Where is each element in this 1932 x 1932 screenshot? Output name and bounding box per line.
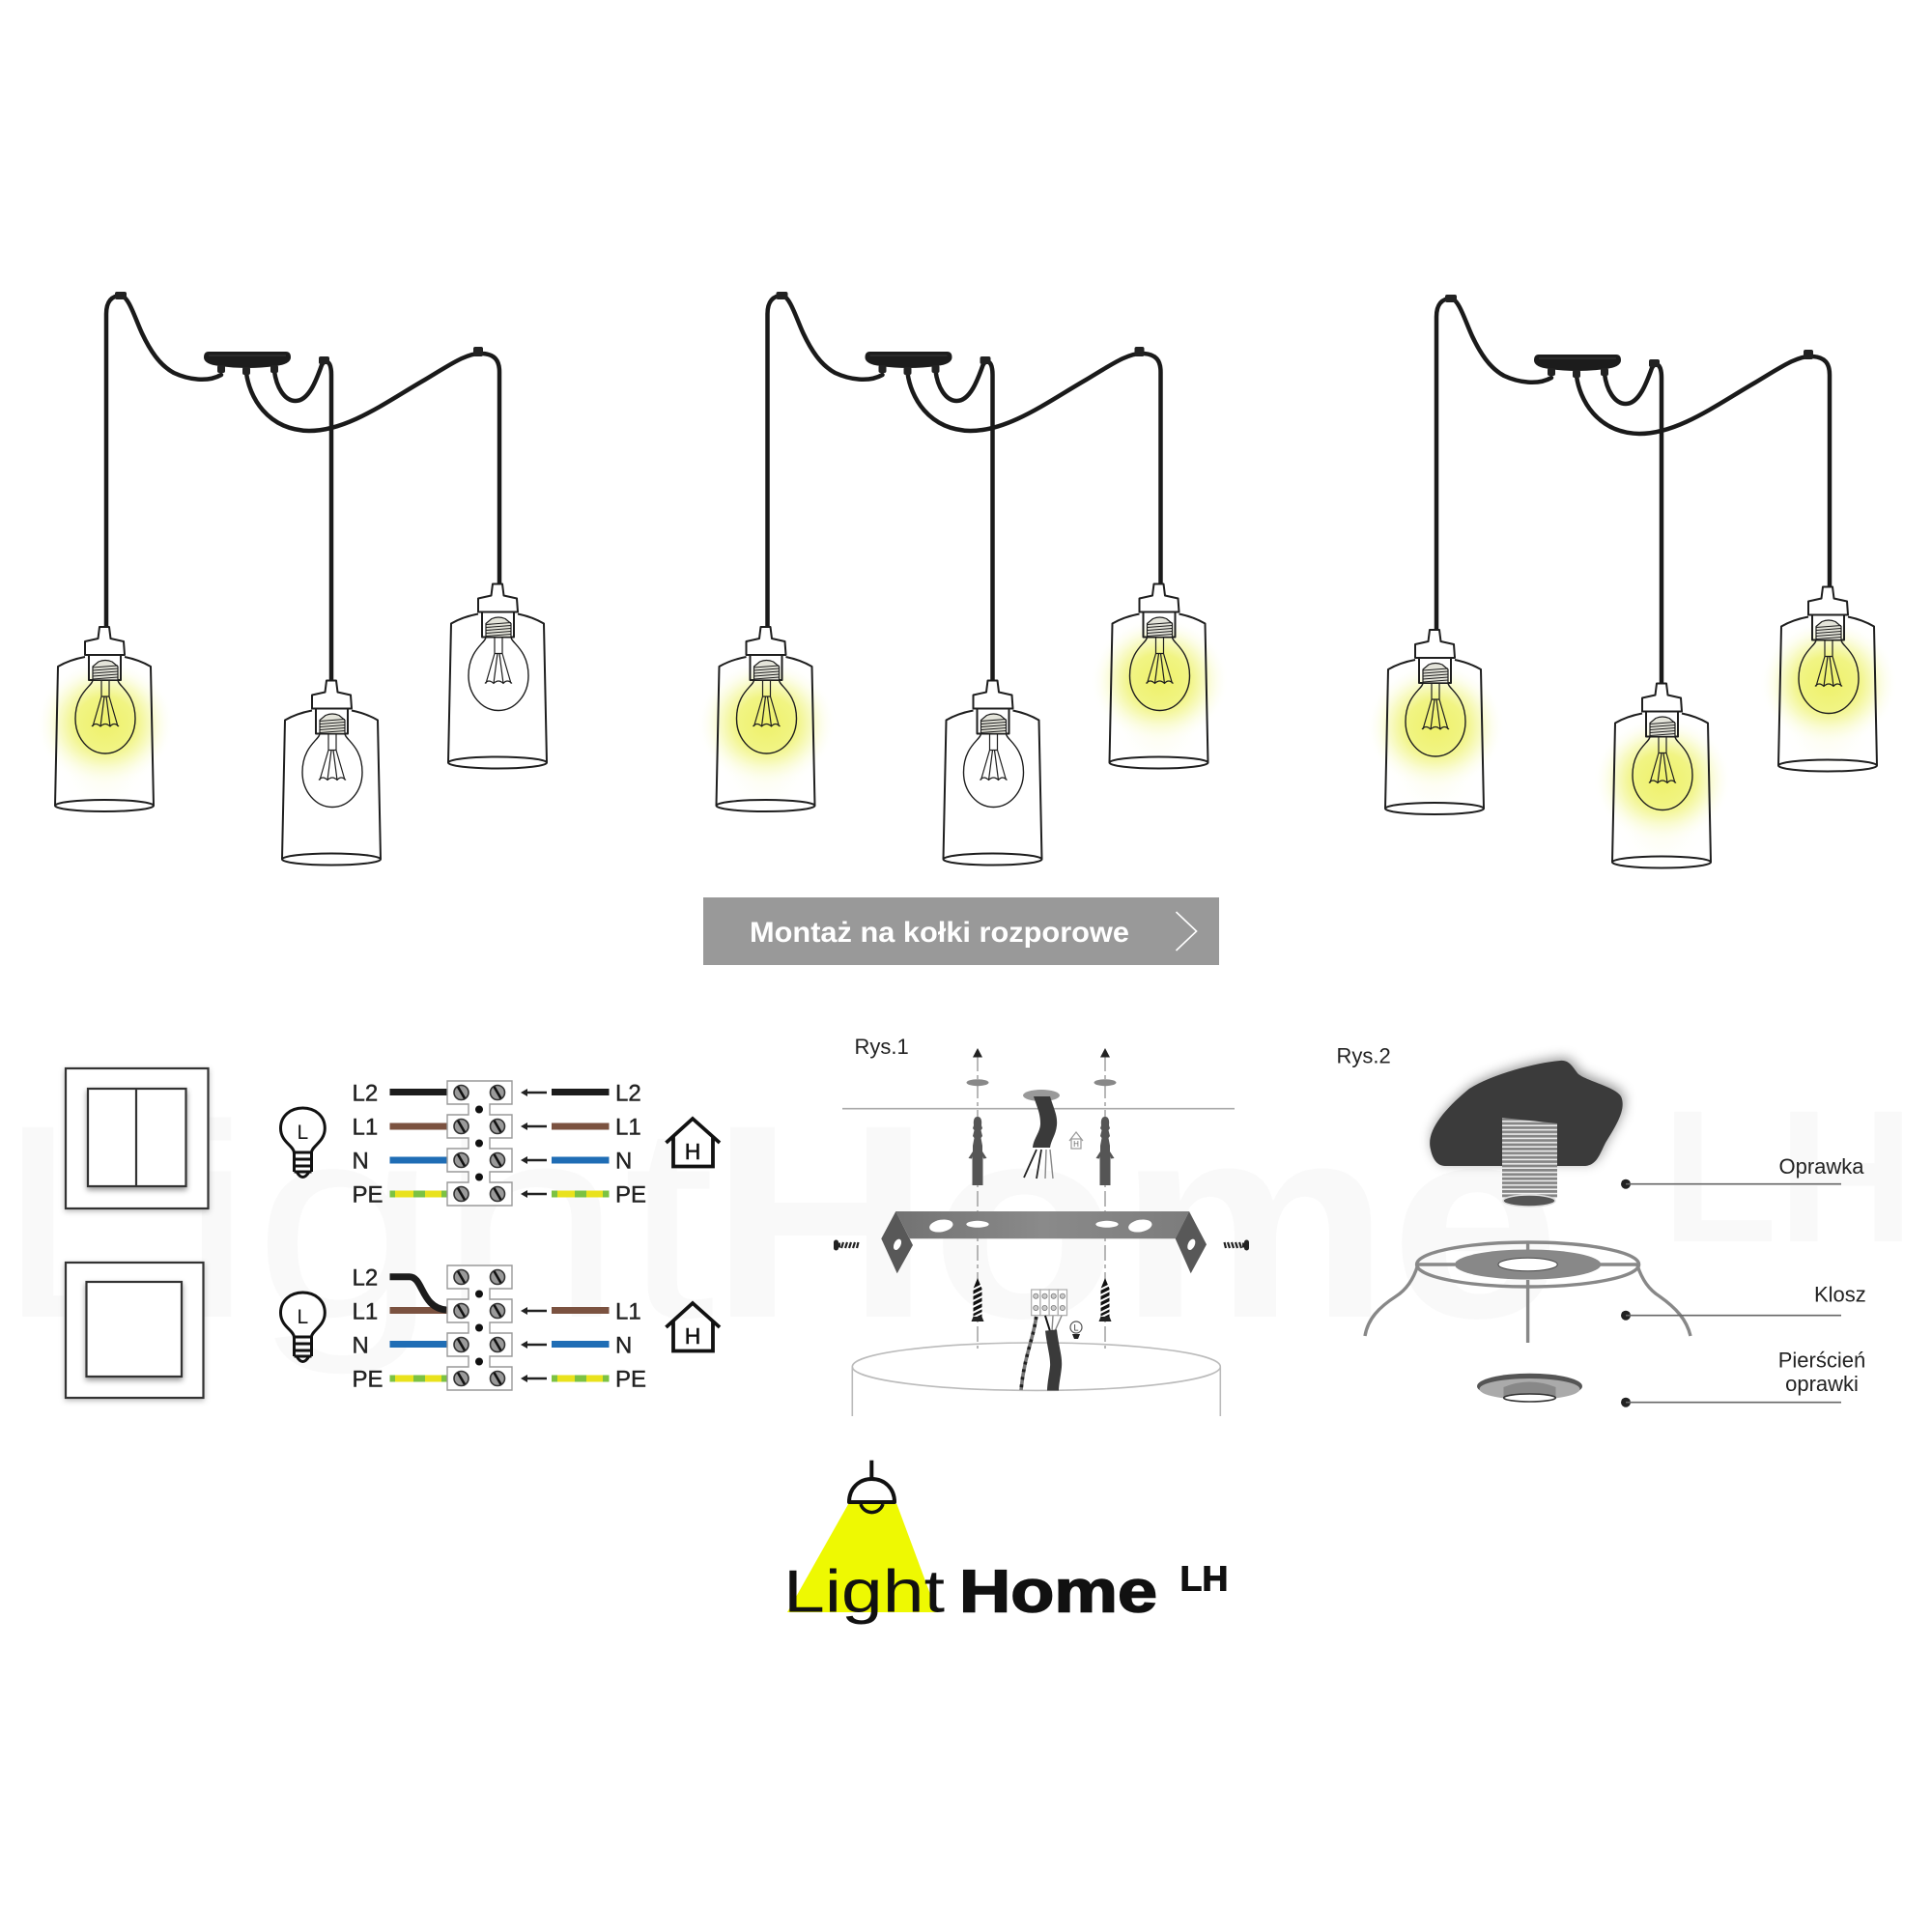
labels: lamp side [352, 1265, 384, 1393]
labels: lamp side: L2 [352, 1080, 378, 1107]
callout: Pierścień oprawki [1621, 1349, 1865, 1407]
callout: Klosz [1621, 1283, 1866, 1321]
icon: lamp bulb: L [298, 1306, 308, 1328]
labels: lamp side: PE [352, 1182, 384, 1208]
socket ring [1477, 1374, 1582, 1402]
labels: lamp side [352, 1080, 384, 1208]
arrows [521, 1089, 547, 1198]
logo lamp icon [849, 1461, 895, 1513]
labels: lamp side: L2 [352, 1265, 378, 1291]
button: Montaż na kołki rozporowe: Montaż na kołki rozporowe [750, 917, 1129, 949]
icon: house [667, 1303, 720, 1350]
cylinder shade outline [852, 1343, 1220, 1416]
terminal block [447, 1081, 512, 1206]
labels: lamp side: N [352, 1333, 369, 1358]
icon: small house: H [1073, 1140, 1079, 1149]
small terminal block [1032, 1290, 1066, 1316]
icon: lamp bulb [280, 1108, 325, 1177]
labels: mains side: PE [615, 1366, 646, 1393]
labels: mains side: N [615, 1148, 632, 1175]
icon: single switch [66, 1263, 203, 1398]
watermark: LightHome LH [0, 1068, 1915, 1377]
ceiling cable [1024, 1096, 1057, 1179]
wires: lamp side [390, 1089, 447, 1198]
watermark: LightHome LH: Light [0, 1068, 716, 1377]
icon: double switch [66, 1068, 209, 1208]
lamp cables [1021, 1316, 1062, 1391]
logo text: Home: Home [959, 1559, 1157, 1625]
icon: small bulb [1070, 1321, 1082, 1339]
logo text: Light: Light [783, 1559, 945, 1625]
labels: mains side: L1 [615, 1115, 641, 1140]
wiring diagram: single switch [280, 1265, 720, 1393]
watermark: LightHome LH: LH [1662, 1071, 1915, 1282]
icon: lamp bulb: L [298, 1122, 308, 1144]
labels: mains side: PE [615, 1182, 646, 1208]
heading: Rys.1: Rys.1 [854, 1035, 909, 1059]
ceiling holes [966, 1079, 1117, 1101]
callout: Oprawka [1621, 1154, 1864, 1189]
button: Montaż na kołki rozporowe [703, 897, 1219, 965]
labels: lamp side: L1 [352, 1115, 378, 1140]
mounting bracket [881, 1211, 1207, 1273]
ceiling line [842, 1108, 1235, 1110]
callout: Oprawka: Oprawka [1779, 1154, 1864, 1179]
dashed axes [978, 1056, 1105, 1349]
wires: mains side [552, 1089, 609, 1198]
icon: house [667, 1119, 720, 1167]
shade frame [1365, 1242, 1690, 1343]
up arrows [973, 1048, 1110, 1057]
labels: mains side: N [615, 1333, 632, 1358]
callout: Pierścień oprawki: Pierścień [1778, 1349, 1865, 1373]
labels: lamp side: L1 [352, 1298, 378, 1325]
figure 1: wall bracket mounting [834, 1035, 1249, 1416]
arrows [521, 1307, 547, 1382]
icon: lamp bulb [280, 1293, 325, 1362]
labels: lamp side: PE [352, 1366, 384, 1393]
labels: mains side: L2 [615, 1080, 641, 1107]
figure 2: shade assembly [1337, 1043, 1866, 1407]
callout: Pierścień oprawki: oprawki [1785, 1372, 1859, 1396]
pendant lamp: left bulb lit [36, 292, 547, 866]
icon: small bulb: L [1073, 1323, 1079, 1333]
side screws [834, 1240, 1249, 1250]
icon: house: H [685, 1323, 700, 1349]
labels: mains side [615, 1298, 646, 1393]
logo text: LH: LH [1180, 1559, 1229, 1599]
wall plugs [968, 1117, 1115, 1185]
threaded socket [1502, 1118, 1557, 1207]
pendant lamp: all three bulbs lit [1366, 295, 1898, 873]
watermark: LightHome LH: Home [710, 1068, 1560, 1376]
heading: Rys.2: Rys.2 [1337, 1043, 1391, 1068]
callout: Klosz: Klosz [1814, 1283, 1866, 1307]
lamp holder base blob [1430, 1061, 1623, 1166]
icon: house: H [685, 1139, 700, 1164]
vertical screws [972, 1278, 1111, 1321]
wiring diagram: double switch [280, 1080, 720, 1208]
icon: small house [1069, 1132, 1083, 1149]
labels: mains side: L1 [615, 1298, 641, 1325]
logo light beam [787, 1504, 937, 1612]
logo: Light Home LH [783, 1461, 1229, 1625]
pendant lamp: left and right bulbs lit [697, 292, 1229, 866]
labels: mains side [615, 1080, 646, 1208]
labels: lamp side: N [352, 1148, 369, 1175]
wires: lamp side [390, 1277, 447, 1381]
wires: mains side [552, 1307, 609, 1381]
terminal block [447, 1265, 512, 1390]
